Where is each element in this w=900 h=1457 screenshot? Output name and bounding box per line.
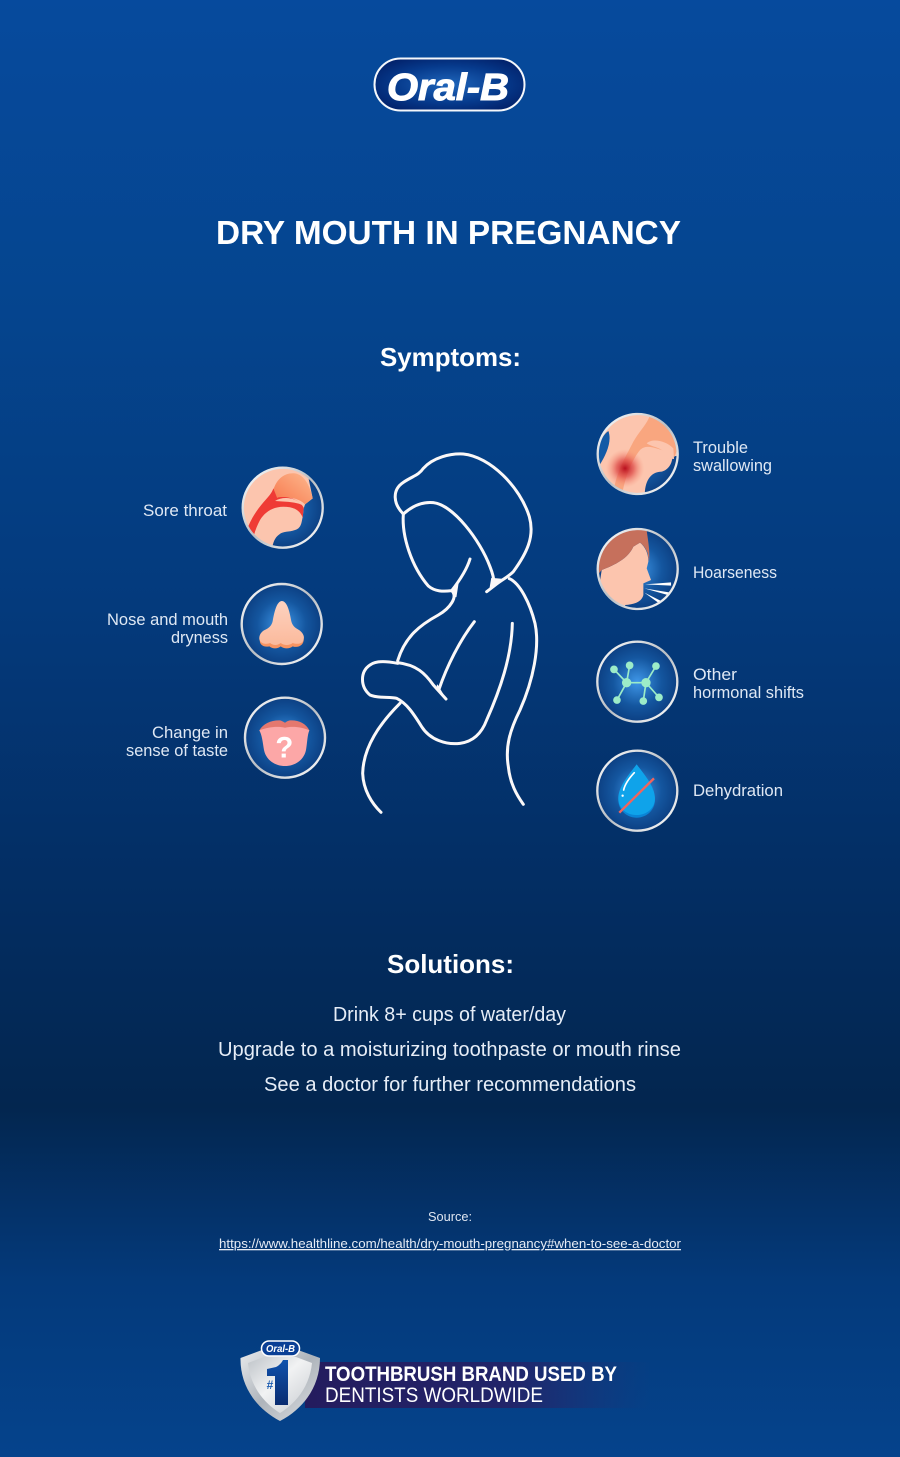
shield with #1: Oral-B	[266, 1344, 295, 1355]
icon: tongue: ?	[275, 732, 293, 765]
symptom: other hormonal shifts	[597, 642, 804, 722]
icon: face with sound lines	[593, 527, 678, 613]
label: sore throat: Sore throat	[143, 501, 227, 520]
title: DRY MOUTH IN PREGNANCY	[216, 214, 681, 251]
shield with #1	[240, 1341, 320, 1421]
badge text: TOOTHBRUSH BRAND USED BY	[325, 1363, 617, 1386]
symptom: sore throat	[143, 462, 323, 550]
logo: Oral-B	[374, 58, 524, 110]
label: change in sense of taste: sense of taste	[126, 741, 228, 760]
icon: nose	[242, 584, 322, 664]
label: nose and mouth dryness: dryness	[171, 628, 228, 647]
logo: Oral-B: Oral-B	[387, 67, 509, 109]
label: hoarseness: Hoarseness	[693, 563, 777, 582]
label: other hormonal shifts: Other	[693, 665, 737, 684]
symptom: dehydration	[597, 751, 783, 831]
heading: symptoms: Symptoms:	[380, 342, 521, 372]
symptom: trouble swallowing	[596, 412, 771, 496]
symptom: nose and mouth dryness	[107, 584, 322, 664]
solutions list: Upgrade to a moisturizing toothpaste or mouth rinse	[218, 1039, 681, 1061]
label: dehydration: Dehydration	[693, 781, 783, 800]
label: trouble swallowing: swallowing	[693, 456, 772, 475]
pregnant woman outline	[362, 454, 537, 812]
shield with #1: #	[267, 1378, 274, 1392]
source: https://www.healthline.com/health/dry-mouth-pregnancy#when-to-see-a-doctor	[219, 1236, 682, 1251]
symptom: hoarseness	[593, 527, 777, 613]
icon: tongue	[245, 698, 325, 778]
solutions list: Drink 8+ cups of water/day	[333, 1004, 566, 1026]
heading: solutions: Solutions:	[387, 949, 514, 979]
icon: throat with red spot	[596, 412, 679, 496]
label: nose and mouth dryness: Nose and mouth	[107, 610, 228, 629]
source: Source:	[428, 1209, 472, 1224]
label: other hormonal shifts	[693, 665, 804, 702]
icon: sore throat	[242, 466, 324, 549]
icon: crossed water drop	[597, 751, 677, 831]
badge text	[325, 1363, 617, 1407]
label: change in sense of taste	[126, 723, 228, 760]
icon: molecule	[597, 642, 677, 722]
label: change in sense of taste: Change in	[152, 723, 228, 742]
solutions list: See a doctor for further recommendations	[264, 1074, 636, 1096]
source	[219, 1209, 682, 1251]
badge text: DENTISTS WORLDWIDE	[325, 1384, 543, 1407]
solutions list	[218, 1004, 681, 1096]
label: trouble swallowing: Trouble	[693, 438, 748, 457]
label: trouble swallowing	[693, 438, 772, 475]
label: other hormonal shifts: hormonal shifts	[693, 683, 804, 702]
brand badge	[240, 1341, 650, 1421]
banner	[305, 1362, 650, 1408]
label: nose and mouth dryness	[107, 610, 228, 647]
symptom: change in sense of taste	[126, 698, 325, 778]
